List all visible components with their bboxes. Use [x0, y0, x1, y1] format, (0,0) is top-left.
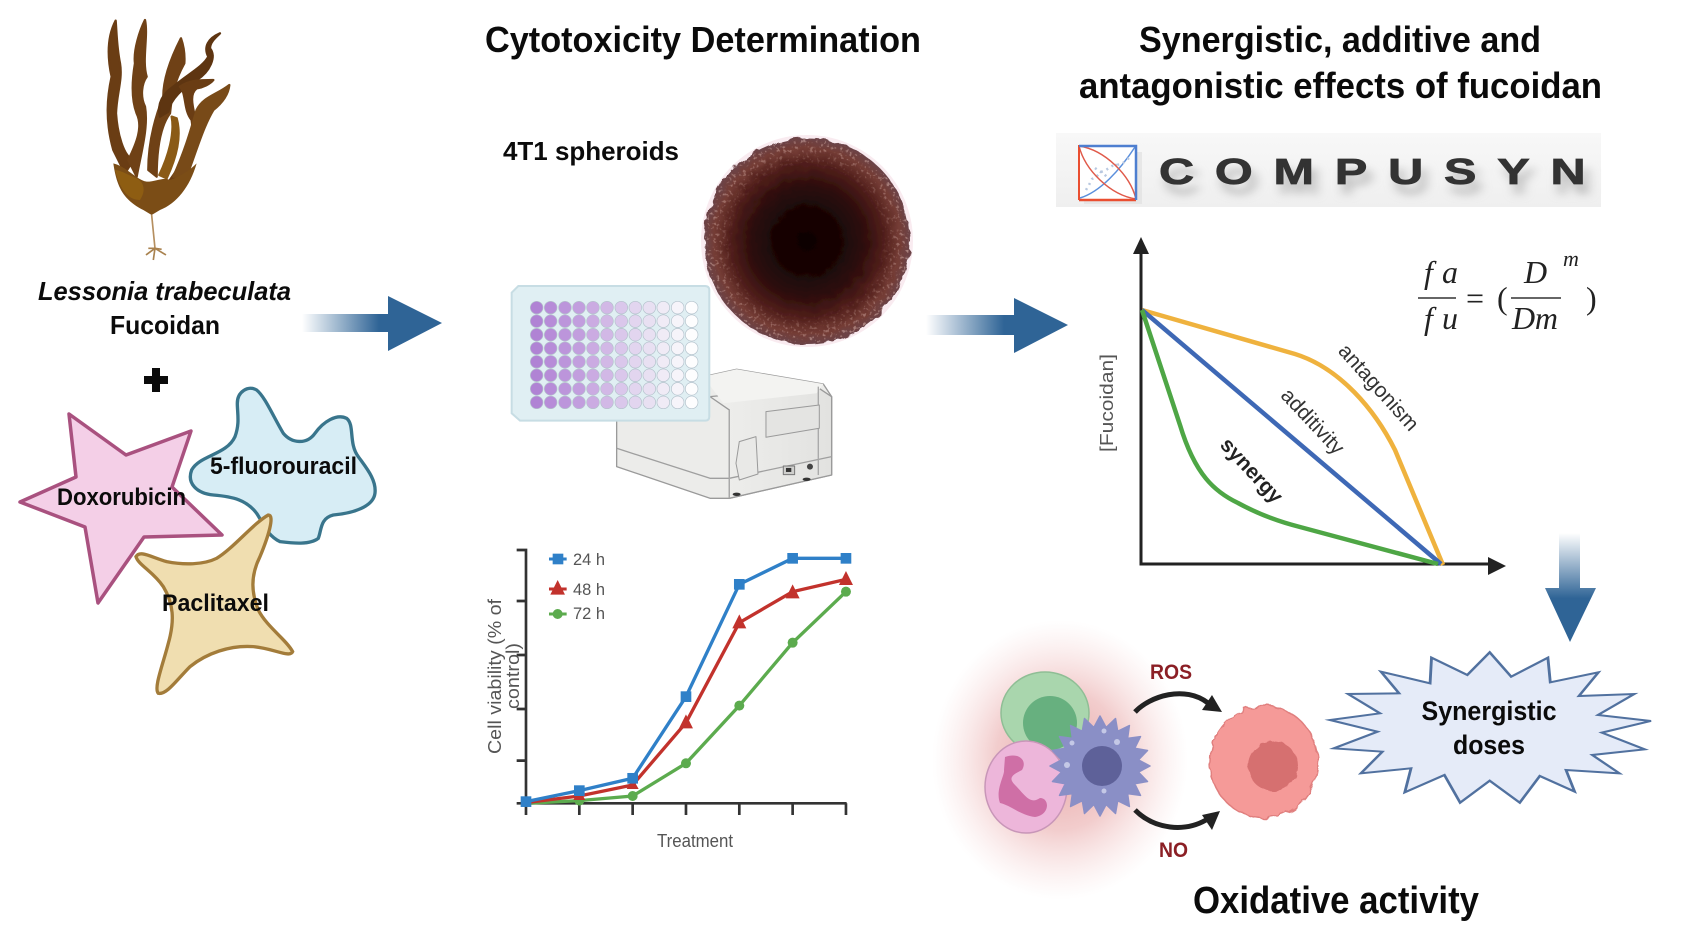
- chart: isobologram: [1097, 237, 1506, 575]
- curve: synergy: [1142, 310, 1438, 564]
- heading: synergistic, additive and antagonistic effects: [1079, 19, 1602, 106]
- formula: median-effect equation: D: [1523, 254, 1547, 290]
- burst: synergistic doses: [1330, 652, 1651, 803]
- arrow: to synergistic doses: [1545, 533, 1596, 642]
- formula: median-effect equation: =: [1466, 280, 1484, 316]
- formula: median-effect equation: m: [1563, 246, 1579, 271]
- arrow: to synergy analysis: [926, 298, 1068, 353]
- formula: median-effect equation: [1418, 246, 1597, 336]
- icon: kelp Lessonia trabeculata: [108, 20, 229, 260]
- heading: synergistic, additive and antagonistic effects: antagonistic effects of fucoidan: [1079, 65, 1602, 106]
- line chart: cell viability: 48 h: [573, 580, 605, 599]
- icon: 96-well plate: [512, 286, 709, 421]
- curve: antagonism: [1142, 310, 1443, 565]
- shape: paclitaxel star: [136, 515, 293, 693]
- shape: 5-fluorouracil blob: 5-fluorouracil: [210, 453, 357, 480]
- series: 24 h: [521, 553, 851, 807]
- line chart: cell viability: [485, 550, 853, 851]
- axes: [1133, 237, 1506, 575]
- wordmark: COMPUSYN: COMPUSYN: [1159, 152, 1586, 192]
- icon: plate reader: [617, 369, 832, 498]
- label: synergy: synergy: [1215, 433, 1287, 508]
- heading: synergistic, additive and antagonistic effects: Synergistic, additive and: [1139, 19, 1541, 60]
- icon: plus sign: [144, 368, 168, 392]
- shape: 5-fluorouracil blob: [190, 388, 375, 543]
- burst: synergistic doses: doses: [1453, 730, 1525, 760]
- formula: median-effect equation: (: [1497, 280, 1508, 316]
- heading: oxidative activity: Oxidative activity: [1193, 880, 1479, 922]
- formula: median-effect equation: ): [1586, 280, 1597, 316]
- line chart: cell viability: 72 h: [573, 604, 605, 623]
- text: species and fucoidan label: Lessonia trabeculata: [38, 276, 291, 306]
- line chart: cell viability: Cell viability (% of: [485, 598, 505, 754]
- series: 48 h: [526, 571, 853, 803]
- label: antagonism: antagonism: [1333, 340, 1423, 436]
- label: NO: NO: [1159, 839, 1188, 862]
- shape: doxorubicin star: [20, 414, 222, 603]
- formula: median-effect equation: fu: [1424, 300, 1458, 336]
- formula: median-effect equation: fa: [1424, 254, 1458, 290]
- label: ROS: ROS: [1150, 661, 1192, 684]
- icon: CompuSyn logo: [1079, 146, 1142, 204]
- text: species and fucoidan label: [38, 276, 291, 340]
- burst: synergistic doses: Synergistic: [1422, 696, 1556, 726]
- arrow: to cytotoxicity: [302, 296, 442, 351]
- text: species and fucoidan label: Fucoidan: [110, 310, 220, 340]
- series: 72 h: [526, 587, 851, 806]
- label: fucoidan axis: [Fucoidan]: [1097, 354, 1117, 452]
- cell: pink neutrophil: [985, 741, 1067, 833]
- logo: CompuSyn banner: [1056, 133, 1601, 207]
- chart legend: [549, 554, 567, 619]
- cell: purple dendritic cell: [1050, 716, 1150, 816]
- cell: green lymphocyte: [1001, 672, 1089, 754]
- cell: red tumor cell: [1210, 706, 1318, 818]
- chart axes: [517, 550, 847, 815]
- heading: cytotoxicity determination: Cytotoxicity Determination: [485, 19, 921, 60]
- image: spheroid: [701, 135, 913, 347]
- label: 4T1 spheroids: 4T1 spheroids: [503, 136, 679, 166]
- line chart: cell viability: control): [503, 643, 523, 709]
- label: additivity: additivity: [1276, 384, 1349, 460]
- line chart: cell viability: Treatment: [657, 831, 733, 851]
- arrows: ROS and NO: [1135, 694, 1222, 830]
- formula: median-effect equation: Dm: [1511, 300, 1558, 336]
- curve: additivity: [1142, 310, 1441, 564]
- line chart: cell viability: 24 h: [573, 550, 605, 569]
- glow: oxidative burst: [932, 620, 1188, 900]
- shape: doxorubicin star: Doxorubicin: [57, 484, 186, 511]
- shape: paclitaxel star: Paclitaxel: [162, 590, 269, 617]
